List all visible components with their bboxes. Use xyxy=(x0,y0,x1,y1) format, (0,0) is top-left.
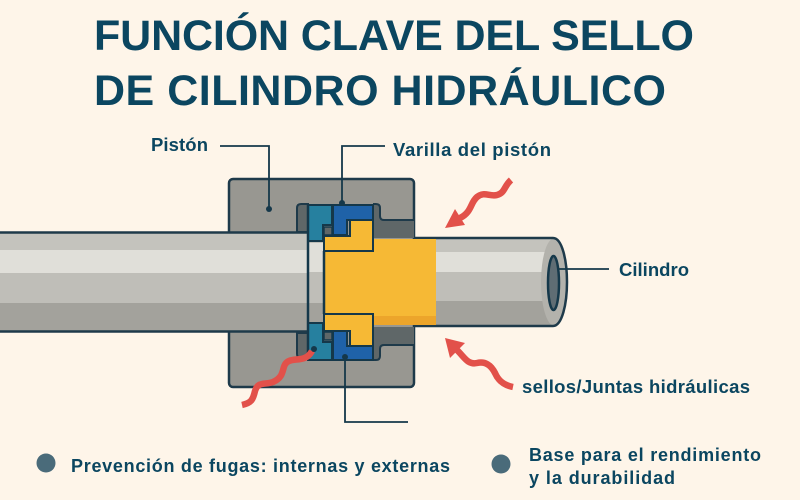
callout: Varilla del pistón xyxy=(339,139,551,206)
callout: Varilla del pistón: Varilla del pistón xyxy=(393,139,551,160)
arrow: upper right red xyxy=(445,180,511,228)
bullet: leak prevention: Prevención de fugas: internas y externas xyxy=(71,456,450,476)
bullet: performance and durability xyxy=(492,445,761,488)
upper blue seal xyxy=(333,205,373,235)
label: sellos/Juntas hidráulicas: sellos/Juntas hidráulicas xyxy=(522,376,750,397)
cylinder tube xyxy=(414,238,567,326)
lower blue seal xyxy=(333,331,373,360)
title: DE CILINDRO HIDRÁULICO xyxy=(94,67,666,115)
callout: Pistón: Pistón xyxy=(151,134,208,155)
lower teal seal xyxy=(308,323,332,360)
callout: Cilindro: Cilindro xyxy=(619,259,689,280)
cylinder bore xyxy=(548,256,559,310)
callout: Cilindro xyxy=(558,259,689,280)
title xyxy=(94,11,694,115)
arrow: lower left red xyxy=(242,346,317,405)
bullet: performance and durability: y la durabilidad xyxy=(529,468,675,488)
small grey spacers xyxy=(324,227,332,340)
piston rod xyxy=(0,232,324,332)
callout: Pistón xyxy=(151,134,272,212)
leader: lower seal xyxy=(342,354,408,422)
housing body xyxy=(229,179,414,387)
yellow piston gland xyxy=(308,205,436,360)
title: FUNCIÓN CLAVE DEL SELLO xyxy=(94,11,694,60)
arrow: lower right red xyxy=(445,338,513,387)
upper teal seal xyxy=(308,205,332,241)
bullet: performance and durability: Base para el rendimiento xyxy=(529,445,761,465)
